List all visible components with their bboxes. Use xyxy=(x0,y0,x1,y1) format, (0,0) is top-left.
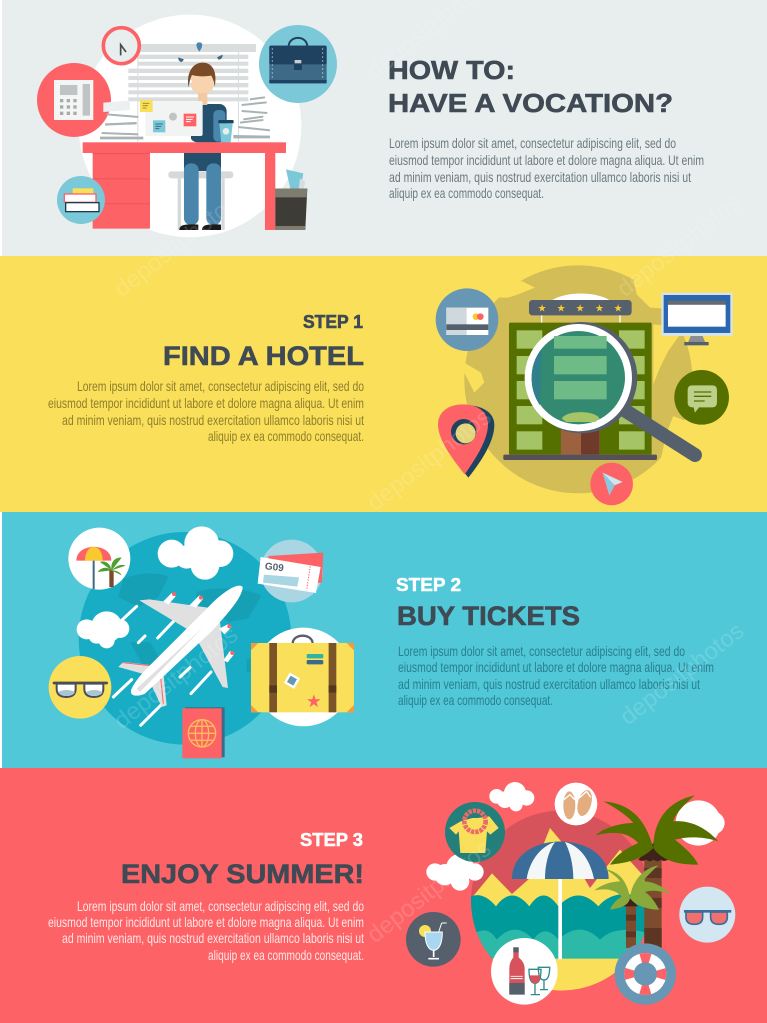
text block: step 1: ad minim veniam, quis nostrud exercitation ullamco laboris nisi ut xyxy=(62,412,364,428)
hotel sign: ★ xyxy=(576,303,585,314)
clouds xyxy=(77,526,233,648)
icon: speech bubble xyxy=(674,370,729,425)
icon: shirt xyxy=(445,802,505,862)
icon: telephone xyxy=(37,63,111,137)
text block: intro: aliquip ex ea commodo consequat. xyxy=(389,185,544,201)
illustration: office worker xyxy=(37,15,337,237)
text block: step 3: aliquip ex ea commodo consequat. xyxy=(208,947,364,963)
text block: step 1: Lorem ipsum dolor sit amet, consectetur adipiscing elit, sed do xyxy=(77,378,364,394)
icon: monitor xyxy=(661,293,733,345)
waste bin xyxy=(275,169,307,230)
blinds xyxy=(128,44,256,142)
magnifying glass xyxy=(525,322,695,455)
laptop xyxy=(140,100,203,141)
beach scene xyxy=(470,808,653,995)
panel: step 3 xyxy=(0,768,767,1023)
icon: suitcase xyxy=(251,628,354,726)
paper stacks xyxy=(100,96,270,139)
icon: books xyxy=(57,176,105,224)
icon: suitcase: ★ xyxy=(306,691,322,711)
heading: buy tickets: STEP 2 xyxy=(396,575,461,595)
desk xyxy=(83,142,286,230)
hotel sign xyxy=(529,293,632,326)
globe xyxy=(79,532,291,745)
coffee cup xyxy=(218,120,234,143)
icon: credit card xyxy=(436,288,498,351)
heading: enjoy summer: STEP 3 xyxy=(300,830,363,850)
heading: how to xyxy=(388,55,673,118)
heading: how to: HAVE A VOCATION? xyxy=(388,88,673,118)
panel: step 2 xyxy=(2,512,767,768)
clouds xyxy=(426,782,534,891)
icon: passport xyxy=(182,707,225,758)
text block: step 2: aliquip ex ea commodo consequat. xyxy=(398,692,553,708)
heading: find a hotel: STEP 1 xyxy=(303,312,363,332)
icon: sunglasses xyxy=(679,887,735,943)
hotel sign: ★ xyxy=(614,303,623,314)
icon: cocktail xyxy=(406,912,461,967)
icon: sunglasses xyxy=(49,656,111,719)
heading: enjoy summer xyxy=(121,830,364,889)
illustration: air travel xyxy=(49,526,354,758)
illustration: beach xyxy=(406,782,735,1005)
text block: intro xyxy=(389,135,704,201)
globe xyxy=(464,265,692,493)
illustration: hotel search xyxy=(436,265,733,505)
watermarks: depositphotos xyxy=(109,621,243,735)
icon: cursor xyxy=(590,463,633,505)
icon: umbrella and palm xyxy=(68,528,130,590)
text block: step 3: ad minim veniam, quis nostrud exercitation ullamco laboris nisi ut xyxy=(62,930,364,946)
text block: step 2 xyxy=(398,643,714,708)
text block: step 3 xyxy=(48,898,364,963)
text block: step 1: eiusmod tempor incididunt ut labore et dolore magna aliqua. Ut enim xyxy=(48,395,364,411)
airplane xyxy=(118,586,243,707)
heading: buy tickets xyxy=(396,575,580,631)
hotel sign: ★ xyxy=(557,303,566,314)
watermarks: depositphotos xyxy=(362,403,496,517)
watermarks xyxy=(109,0,749,949)
hotel building xyxy=(503,323,657,460)
palm trees xyxy=(594,795,725,948)
text block: intro: Lorem ipsum dolor sit amet, consectetur adipiscing elit, sed do xyxy=(389,135,676,151)
watermarks: depositphotos xyxy=(362,835,496,949)
icon: wine xyxy=(491,938,558,1005)
icon: clock xyxy=(103,28,139,64)
worker xyxy=(179,63,227,230)
watermarks: depositphotos xyxy=(612,189,746,303)
chair xyxy=(168,171,233,230)
heading: find a hotel xyxy=(163,312,364,371)
text block: step 1 xyxy=(48,378,364,444)
panel: how to xyxy=(2,0,767,256)
hotel sign: ★ xyxy=(595,303,604,314)
text block: step 3: eiusmod tempor incididunt ut labore et dolore magna aliqua. Ut enim xyxy=(48,914,364,930)
icon: flip flops xyxy=(555,783,597,825)
icon: ticket xyxy=(258,540,323,602)
watermarks: depositphotos xyxy=(109,189,243,303)
icon: life ring xyxy=(615,943,676,1005)
heading: how to: HOW TO: xyxy=(388,55,515,85)
panel: step 1 xyxy=(0,256,767,512)
drops xyxy=(178,42,223,62)
heading: find a hotel: FIND A HOTEL xyxy=(163,341,364,371)
heading: buy tickets: BUY TICKETS xyxy=(397,601,580,631)
umbrella xyxy=(512,841,609,959)
text block: step 3: Lorem ipsum dolor sit amet, consectetur adipiscing elit, sed do xyxy=(77,898,364,914)
hotel sign: ★ xyxy=(538,303,547,314)
heading: enjoy summer: ENJOY SUMMER! xyxy=(121,859,364,889)
icon: briefcase xyxy=(259,25,337,103)
icon: map pin xyxy=(438,404,494,478)
icon: ticket: G09 xyxy=(264,561,285,574)
watermarks: depositphotos xyxy=(615,617,749,731)
speed lines xyxy=(113,606,211,725)
text block: step 1: aliquip ex ea commodo consequat. xyxy=(208,428,364,444)
